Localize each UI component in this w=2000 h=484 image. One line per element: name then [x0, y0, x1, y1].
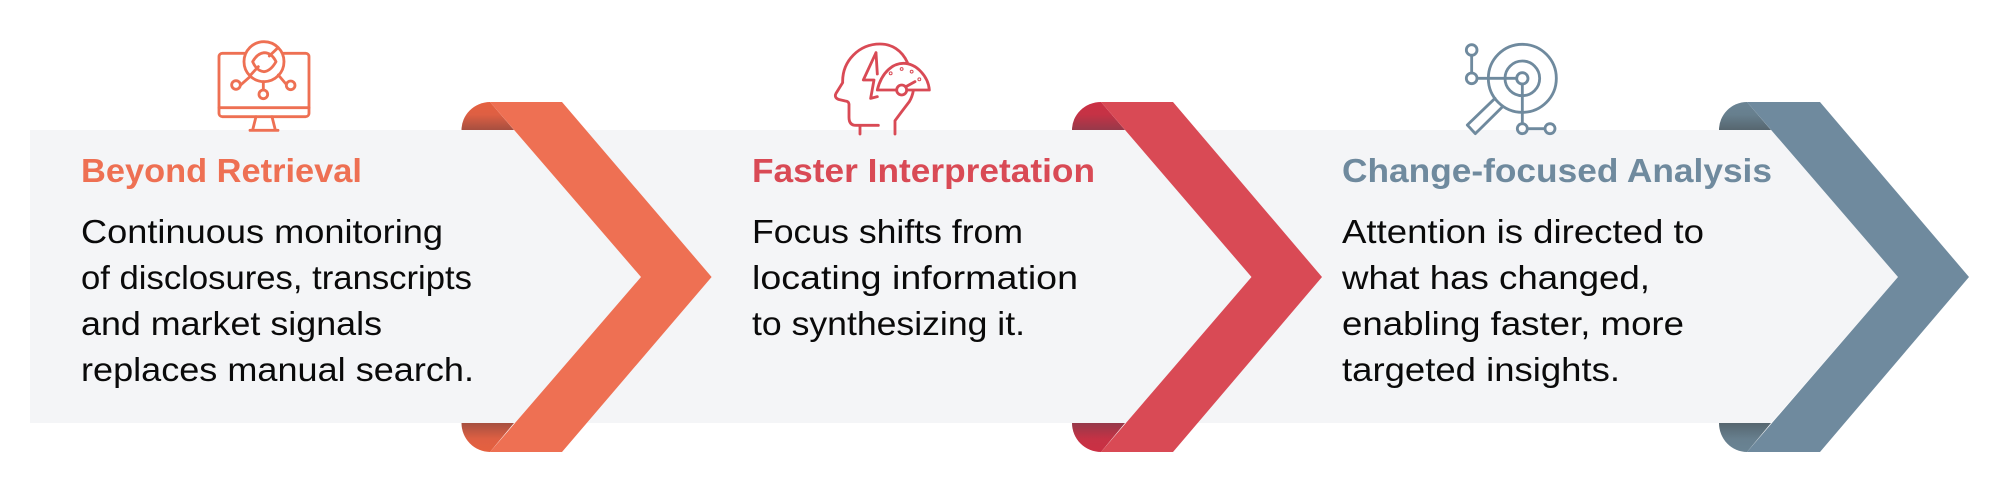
heading: Change-focused Analysis: Change-focused Analysis	[1342, 153, 1772, 190]
arrow: orange chevron	[462, 102, 712, 452]
icon: monitor with eye and nodes	[219, 42, 309, 130]
arrow: red chevron	[1072, 102, 1322, 452]
text block: step 3 body	[1341, 214, 1704, 389]
arrow: blue chevron	[1719, 102, 1969, 452]
heading: Beyond Retrieval: Beyond Retrieval	[81, 153, 362, 190]
step 1 text	[81, 153, 474, 389]
icon: target with magnifier and nodes	[1466, 44, 1556, 134]
text block: step 1 body: and market signals	[81, 306, 382, 343]
text block: step 3 body: targeted insights.	[1342, 352, 1620, 389]
heading: Faster Interpretation: Faster Interpretation	[752, 153, 1095, 190]
step 2 text	[752, 153, 1095, 343]
icon: head with lightning and gauge	[835, 44, 929, 134]
text block: step 2 body	[752, 214, 1078, 343]
text block: step 2 body: locating information	[752, 260, 1078, 297]
text block: step 1 body: Continuous monitoring	[81, 214, 443, 251]
text block: step 1 body: of disclosures, transcripts	[81, 260, 472, 297]
text block: step 1 body: replaces manual search.	[81, 352, 474, 389]
text block: step 2 body: Focus shifts from	[752, 214, 1023, 251]
text block: step 3 body: what has changed,	[1341, 260, 1650, 297]
text block: step 2 body: to synthesizing it.	[752, 306, 1025, 343]
text block: step 3 body: enabling faster, more	[1342, 306, 1684, 343]
text block: step 1 body	[81, 214, 474, 389]
step 3 text	[1341, 153, 1772, 389]
text block: step 3 body: Attention is directed to	[1342, 214, 1704, 251]
panel: background band	[30, 130, 1898, 423]
